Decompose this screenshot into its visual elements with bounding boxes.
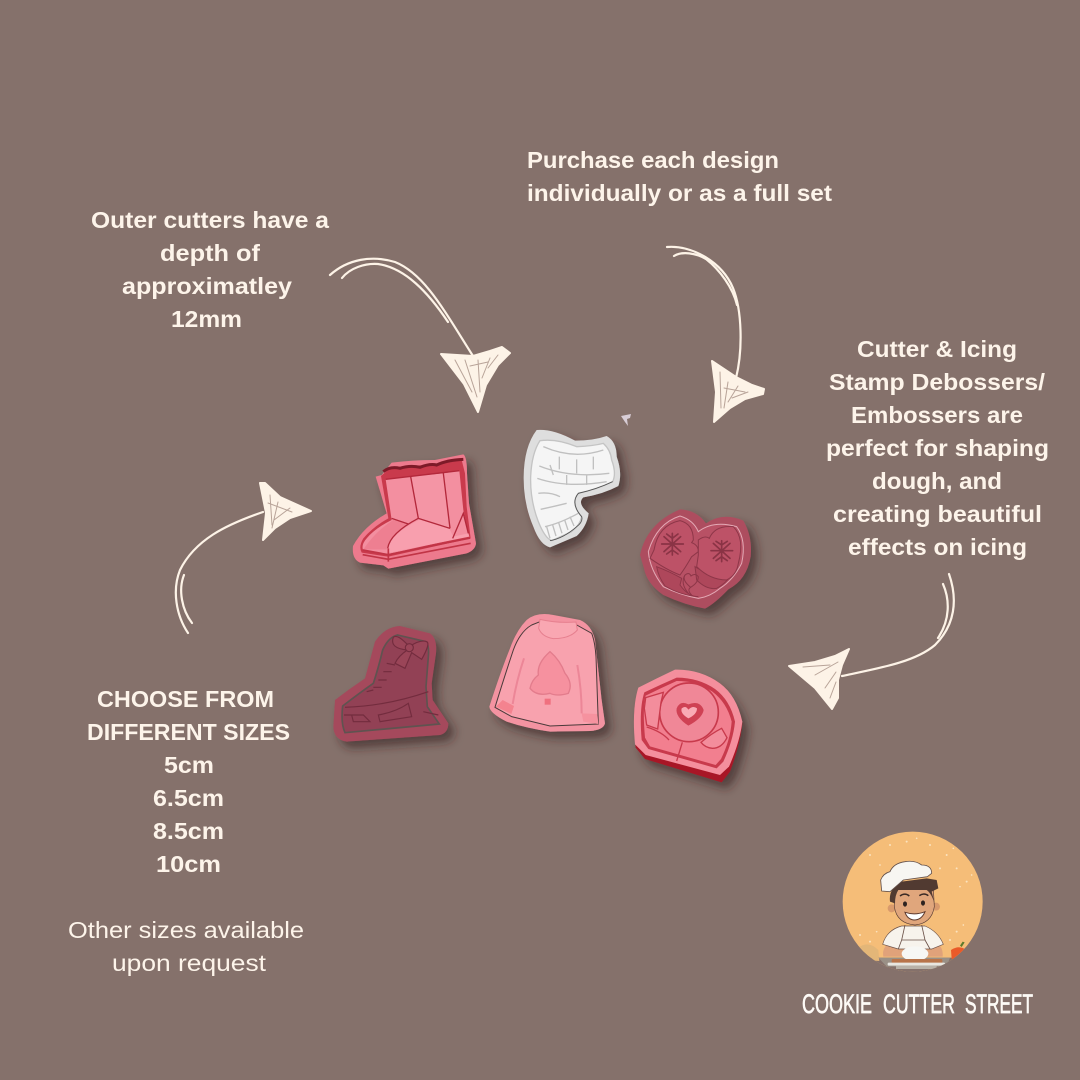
globe: left hand: [644, 692, 663, 729]
arrow: sizes callout to boot: [176, 483, 311, 633]
text: debossers and embossers: dough, and: [872, 468, 1002, 494]
text: size options: upon request: [112, 950, 267, 976]
text: size options: Other sizes available: [68, 917, 304, 943]
infographic canvas: [69, 151, 1048, 1014]
cutter: sweater: [489, 614, 605, 732]
logo wordmark: CUTTER: [883, 989, 955, 1019]
sweater: tree motif: [530, 652, 570, 695]
cutter: mittens: [640, 509, 751, 609]
text: size options: CHOOSE FROM: [97, 686, 274, 712]
logo wordmark: [802, 989, 1033, 1019]
text: size options: 8.5cm: [153, 818, 224, 844]
text: size options: 6.5cm: [153, 785, 224, 811]
arrow: depth callout to boot: [330, 259, 510, 412]
mitten: heart: [684, 574, 698, 587]
text: debossers and embossers: [826, 336, 1049, 560]
globe: sphere: [660, 683, 718, 742]
globe: heart ornament: [676, 703, 704, 726]
text: size options: [68, 686, 304, 976]
text: purchase options: individually or as a full set: [527, 180, 832, 206]
text: debossers and embossers: Stamp Debossers/: [829, 369, 1046, 395]
mitten: left with snowflake: [650, 521, 698, 575]
mitten: right with snowflake: [697, 526, 741, 580]
globe: right hand: [701, 728, 727, 748]
text: debossers and embossers: perfect for shaping: [826, 435, 1049, 461]
text: outer cutter depth: approximatley: [122, 273, 292, 299]
arrow: stamps callout to globe: [789, 574, 954, 709]
text: size options: 10cm: [156, 851, 221, 877]
text: outer cutter depth: depth of: [160, 240, 260, 266]
text: purchase options: Purchase each design: [527, 147, 779, 173]
text: outer cutter depth: Outer cutters have a: [91, 207, 329, 233]
cutter: boot: [353, 454, 476, 569]
mitten: lower cuffs: [657, 567, 733, 597]
icon: chef illustration: [840, 832, 987, 978]
cutter: snow globe: [634, 670, 742, 782]
text: debossers and embossers: effects on icing: [848, 534, 1027, 560]
cutter: scarf: [524, 430, 620, 547]
arrow: purchase callout to mittens: [667, 247, 764, 422]
logo: Cookie Cutter Street: [802, 832, 1033, 1019]
text: debossers and embossers: creating beautiful: [833, 501, 1042, 527]
text: debossers and embossers: Cutter & Icing: [857, 336, 1017, 362]
sweater: cuffs: [496, 700, 514, 714]
cutter: ice skate: [333, 626, 448, 742]
logo wordmark: COOKIE: [802, 989, 872, 1019]
text: size options: 5cm: [164, 752, 214, 778]
tiny speck from the product photo: [621, 414, 631, 426]
text: debossers and embossers: Embossers are: [851, 402, 1023, 428]
text: outer cutter depth: 12mm: [171, 306, 242, 332]
text: outer cutter depth: [91, 207, 329, 332]
logo wordmark: STREET: [965, 989, 1033, 1019]
text: size options: DIFFERENT SIZES: [87, 719, 290, 745]
sweater: collar: [539, 619, 577, 639]
text: purchase options: [527, 147, 832, 206]
